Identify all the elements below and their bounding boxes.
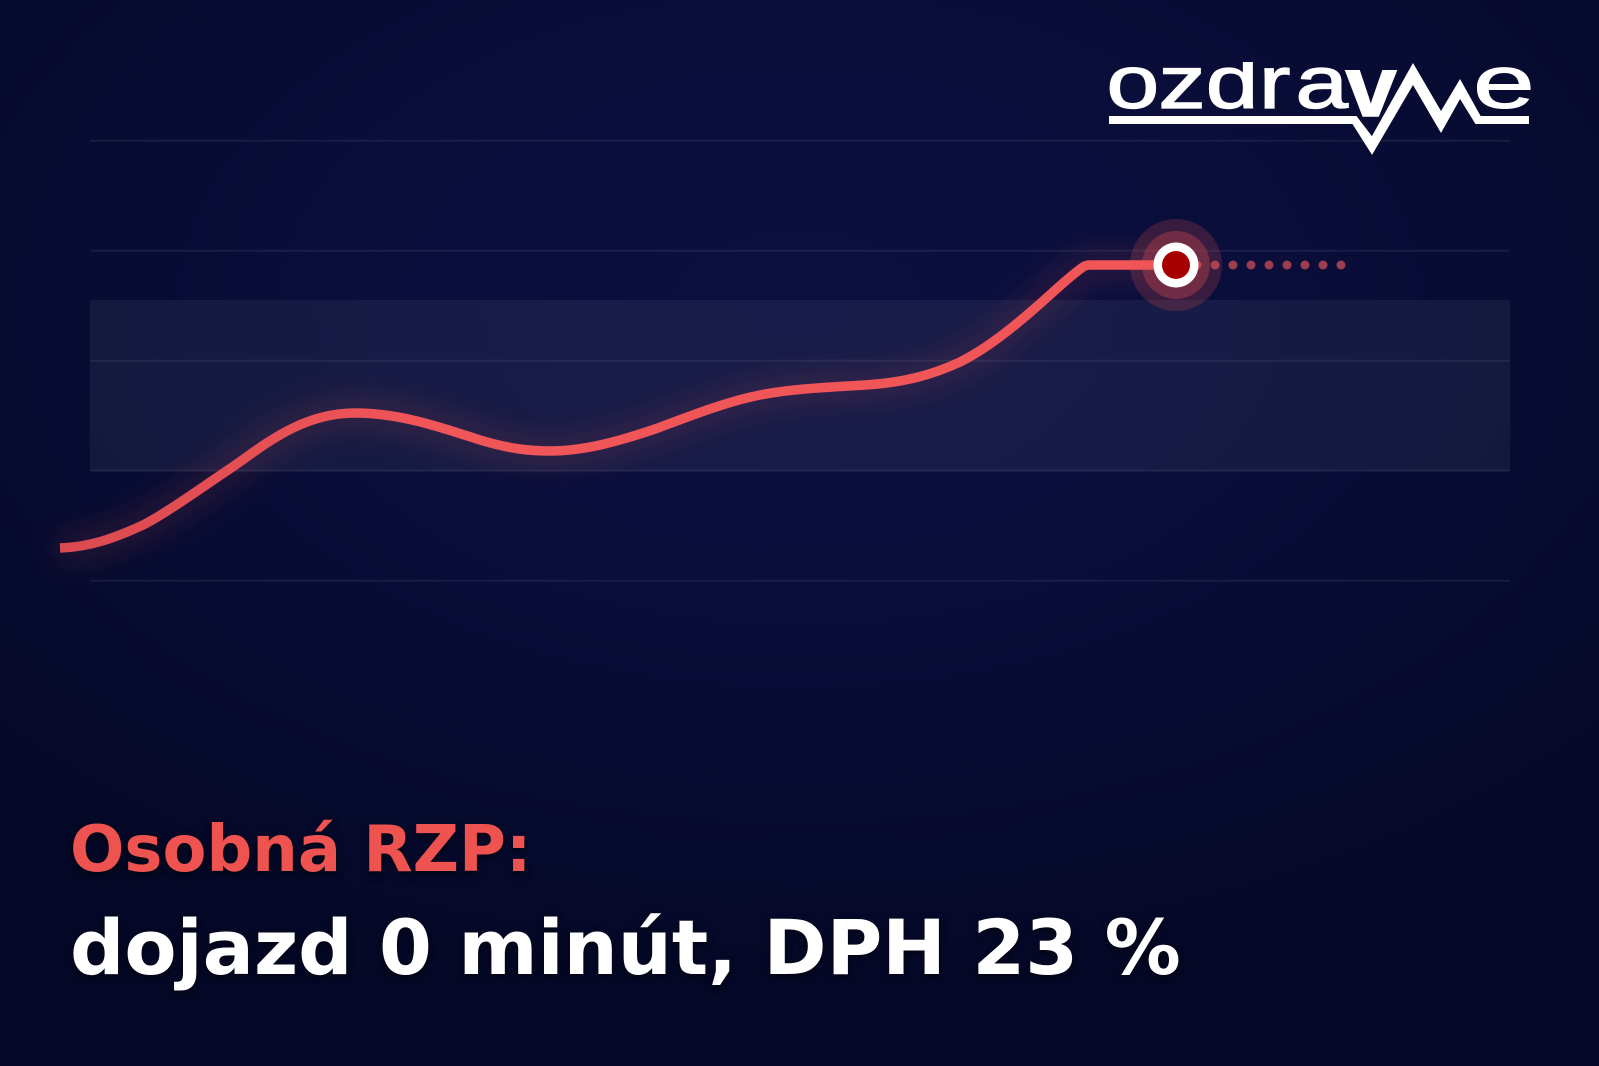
highlighted band [90, 300, 1510, 471]
current point marker [1130, 219, 1222, 311]
logo: ozdravme: ozdra [1107, 42, 1349, 125]
heading: Osobná RZP: Osobná RZP: [70, 813, 532, 887]
dotted forecast line [1192, 260, 1346, 270]
line chart [56, 62, 1531, 582]
red curve [60, 265, 1156, 548]
logo: ozdravme [1109, 62, 1531, 155]
curve glow [60, 265, 1156, 548]
logo: ozdravme: v [1346, 39, 1397, 134]
logo: ozdravme: e [1473, 41, 1535, 124]
subheading: dojazd 0 minút, DPH 23 %: dojazd 0 minút, DPH 23 % [70, 903, 1181, 992]
